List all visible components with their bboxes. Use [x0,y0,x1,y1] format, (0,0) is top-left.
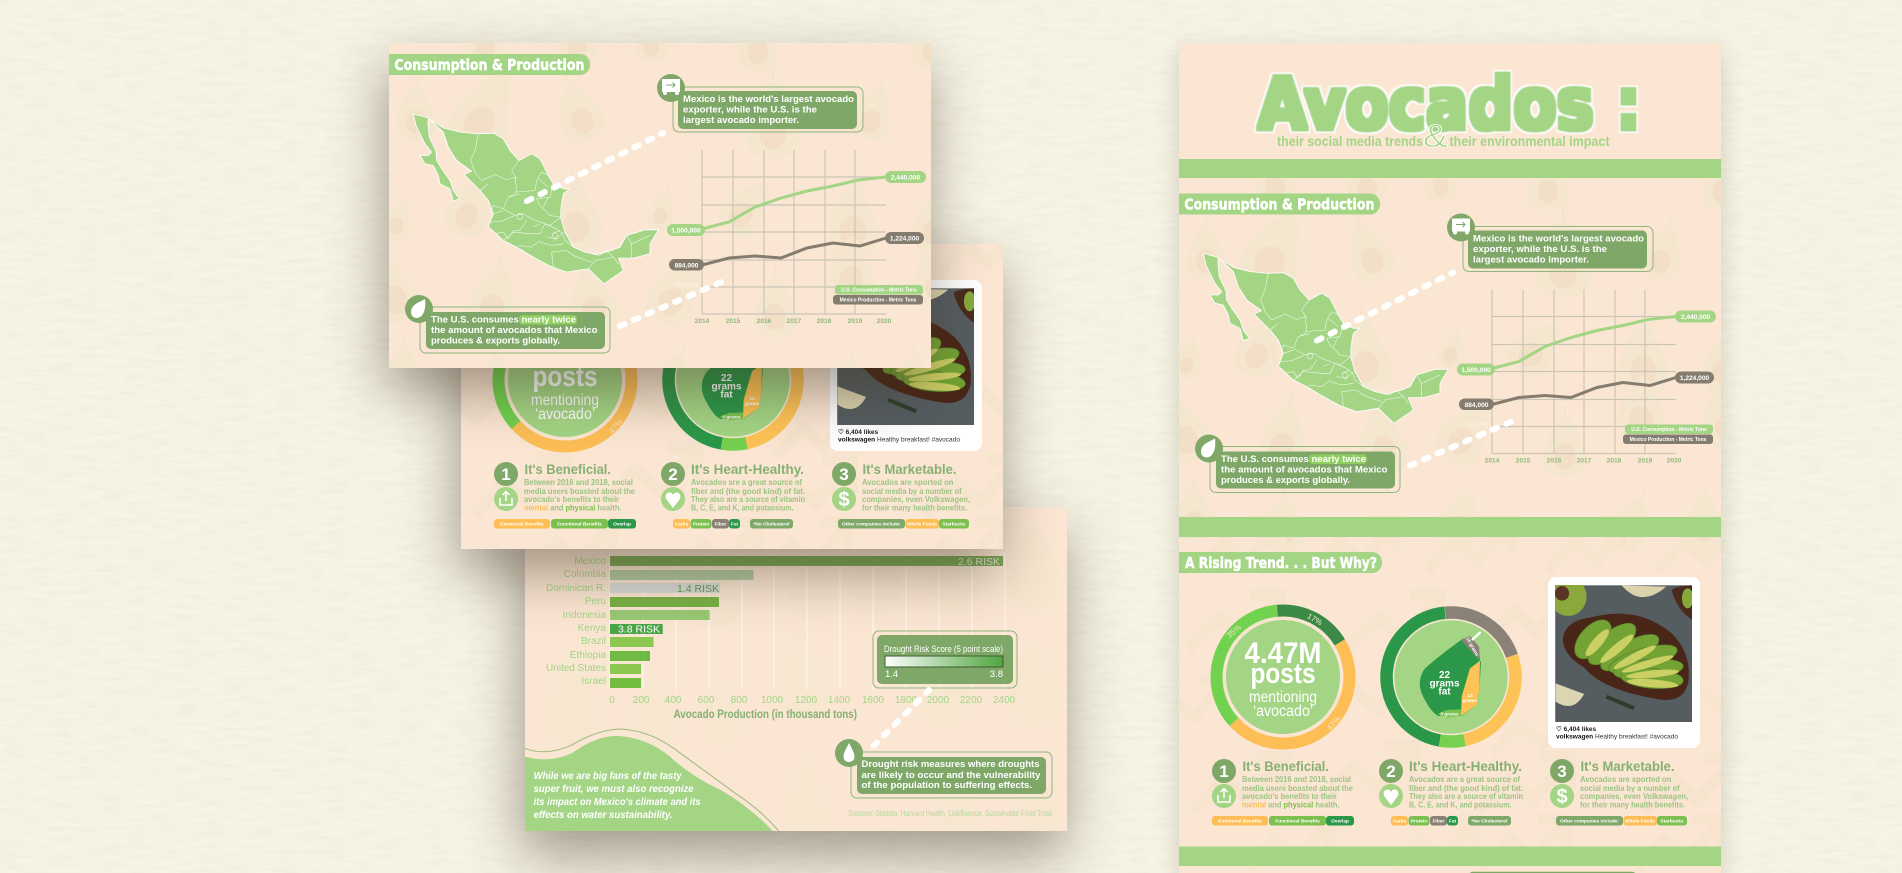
point 3: marketable: companies, even Volkswagen, [862,494,970,504]
line chart: 2017 [787,318,802,325]
line chart: U.S. Consumption - Metric Tons [841,288,917,294]
icon: avocado nutrition: 3 grams [722,414,741,420]
map of Mexico [413,114,658,284]
bar chart: avocado production: 1400 [828,695,851,706]
donut: 4.47M posts: 35% [1225,623,1243,640]
point 3: marketable: It's Marketable. [862,462,956,477]
point 1: beneficial: 1 [1219,762,1229,781]
point 1: beneficial: Between 2016 and 2018, social [1242,774,1351,784]
icon: delivery truck [657,74,685,102]
point 2: heart-healthy: *No Cholesterol [754,522,789,528]
bar chart: avocado production: 1200 [795,695,818,706]
point 2: heart-healthy: Fat [1449,818,1456,824]
donut: 4.47M posts: 47% [1325,714,1342,732]
point 2: heart-healthy: They also are a source of vitamin [1409,791,1523,801]
point 2: heart-healthy: It's Heart-Healthy. [1409,759,1522,774]
icon: avocado seed [1195,434,1223,462]
point 3: marketable: Avocados are sported on [1580,774,1671,784]
divider band [1179,159,1721,178]
bar chart: avocado production: Israel [582,676,606,687]
donut: 4.47M posts: posts [1250,658,1316,690]
donut: 4.47M posts: 35% [507,326,525,343]
point 3: marketable: 3 [839,465,849,484]
photo card: instagram post: volkswagen Healthy breakfast! #avocado [1556,734,1679,740]
icon: avocado nutrition: 13 [749,396,755,402]
line chart: 2014 [1485,458,1500,464]
icon: avocado nutrition [1420,633,1481,718]
point 2: heart-healthy: 2 [668,465,678,484]
bar chart: avocado production: Dominican R. [546,583,606,594]
section tag: Consumption & Production [1184,196,1374,214]
line chart: 2017 [1577,458,1592,464]
bar chart: avocado production: United States [546,663,606,674]
line chart: 2018 [817,318,832,325]
point 1: beneficial [1212,759,1354,826]
point 1: beneficial: It's Beneficial. [1242,759,1329,774]
icon: avocado nutrition: fat [1438,686,1451,698]
callout: exporter: largest avocado importer. [1473,254,1589,266]
line chart: 2015 [726,318,741,325]
callout: importer: produces & exports globally. [1221,475,1350,486]
icon: avocado nutrition: 10 grams [746,339,762,361]
donut: 4.47M posts: mentioning [531,392,599,409]
icon: avocado nutrition: 22 [1439,670,1450,681]
point 1: beneficial: Emotional Benefits [500,522,544,528]
photo card: instagram post: volkswagen Healthy breakfast! #avocado [838,436,961,444]
bar chart: avocado production: Ethiopia [570,650,606,661]
section background: avocados [1145,140,1750,557]
icon: share [494,487,518,511]
legend: drought risk score: 3.8 [990,669,1003,680]
point 2: heart-healthy: Protein [1411,818,1427,824]
point 2: heart-healthy: Carbs [1393,818,1407,824]
icon: dollar: $ [838,489,850,511]
bar chart: avocado production: 2400 [993,695,1016,706]
title: & [1423,118,1448,154]
point 3: marketable: 3 [1557,762,1567,781]
line chart: 2019 [1638,458,1653,464]
point 3: marketable [1550,759,1688,826]
point 1: beneficial: Overlap [613,522,631,528]
point 2: heart-healthy: fiber and (the good kind) of fat. [1409,783,1523,793]
section background: arrows [1149,521,1756,869]
section tag: A Rising Trend. . . But Why? [1185,554,1377,572]
callout: exporter [1447,214,1653,272]
bar chart: avocado production: Colombia [564,569,606,580]
point 3: marketable: Other companies include: [842,522,901,528]
point 3: marketable: companies, even Volkswagen, [1580,791,1688,801]
line chart: 1,224,000 [1680,375,1709,382]
line chart: 2019 [848,318,863,325]
line chart: Mexico Production - Metric Tons [1630,437,1707,443]
point 2: heart-healthy: fiber and (the good kind) of fat. [691,486,805,496]
dotted connector to importer callout [1410,420,1516,466]
line chart: 884,000 [675,262,699,270]
callout: exporter: Mexico is the world's largest avocado [683,94,854,105]
section tag: A Rising Trend. . . But Why? [467,257,659,275]
icon: water drop [835,739,863,767]
bar chart: avocado production: 2.6 RISK [958,556,1000,568]
panel: full infographic poster [1179,43,1721,873]
icon: avocado nutrition [702,336,763,420]
point 1: beneficial: Functional Benefits [557,522,602,528]
callout: drought risk: Drought risk measures where droughts [862,759,1040,770]
line chart: 2018 [1607,458,1622,464]
callout: importer: The U.S. consumes nearly twice [431,314,576,326]
line chart [1457,290,1716,464]
bar chart: avocado production: 1.4 RISK [677,583,719,595]
legend: drought risk score: 1.4 [885,669,898,680]
line chart: 2020 [1667,458,1682,464]
line chart: 2016 [1547,458,1562,464]
callout: drought risk: are likely to occur and the vulnerability [862,770,1041,781]
wave callout: super fruit, we must also recognize [534,783,694,795]
line chart: 2020 [877,318,892,325]
section: rising trend [1179,552,1700,826]
legend: drought risk score: Drought Risk Score (5 point scale) [884,644,1003,655]
callout: importer: the amount of avocados that Mexico [1221,464,1388,476]
line chart: 884,000 [1465,402,1489,409]
donut: nutrition [651,298,815,462]
point 1: beneficial: media users boasted about the [1242,783,1353,793]
point 3: marketable: for their many health benefits. [1580,800,1685,810]
callout: importer: the amount of avocados that Mexico [431,325,598,336]
dotted connector to exporter callout [1317,272,1453,340]
point 3: marketable: for their many health benefits. [862,502,967,512]
callout: importer [1195,434,1400,492]
point 3: marketable: social media by a number of [862,486,962,496]
point 1: beneficial: avocado's benefits to their [524,494,620,504]
point 1: beneficial: It's Beneficial. [524,462,611,477]
donut: 4.47M posts [1189,583,1377,771]
line chart: 500,000 [675,282,699,289]
point 2: heart-healthy: Avocados are a great source of [1409,774,1520,784]
divider band [1179,517,1721,537]
bar chart: avocado production: Mexico [574,556,606,567]
icon: avocado nutrition: grams [1429,678,1460,690]
callout: exporter: largest avocado importer. [683,115,799,126]
point 3: marketable: Other companies include: [1560,818,1619,824]
bar chart: avocado production: 600 [698,695,715,706]
callout: exporter: exporter, while the U.S. is the [1473,244,1607,255]
point 2: heart-healthy: B, C, E, and K, and potassium. [1409,800,1512,810]
point 3: marketable: Starbucks [1660,818,1684,824]
line chart: 1,224,000 [890,236,919,242]
point 2: heart-healthy: Fiber [1433,818,1444,824]
icon: heart [661,487,685,511]
wave callout: effects on water sustainability. [534,809,673,821]
bar chart: avocado production: 1000 [761,695,784,706]
icon: avocado nutrition: 22 [721,373,732,384]
divider band [1179,846,1721,866]
callout: drought risk: of the population to suffering effects. [862,780,1032,791]
line chart: 2016 [757,318,772,325]
point 2: heart-healthy [661,462,805,528]
point 1: beneficial: avocado's benefits to their [1242,791,1338,801]
point 3: marketable [832,462,970,528]
point 2: heart-healthy: Avocados are a great source of [691,477,802,487]
photo card: instagram post [830,280,982,451]
point 1: beneficial: media users boasted about the [524,486,635,496]
photo card: instagram post [1548,577,1700,748]
point 1: beneficial: Functional Benefits [1275,818,1320,824]
icon: dollar: $ [1556,786,1568,808]
icon: heart [1379,784,1403,808]
next section heading edge [1468,872,1637,873]
photo card: instagram post: ♡ 6,404 likes [1556,725,1597,733]
icon: share [1212,784,1236,808]
icon: delivery truck [1447,214,1475,242]
title: their environmental impact [1450,134,1610,149]
bar chart: avocado production: 0 [609,695,615,706]
callout: exporter: Mexico is the world's largest avocado [1473,234,1644,244]
line chart: 500,000 [1465,422,1489,428]
dotted connector to exporter callout [527,133,663,201]
callout: importer [405,295,610,353]
point 3: marketable: It's Marketable. [1580,759,1674,774]
line chart: 2,440,000 [891,174,920,182]
photo card: instagram post: ♡ 6,404 likes [838,428,879,436]
dotted connector to importer callout [620,280,726,326]
section: consumption and production [1179,194,1716,492]
icon: avocado seed [405,295,433,323]
point 1: beneficial: Overlap [1331,818,1349,824]
bar chart: avocado production: Peru [585,596,606,607]
donut: 4.47M posts: 17% [1306,612,1324,627]
panel: rising trend [461,244,1003,549]
title: their social media trends [1277,134,1423,149]
donut: 4.47M posts: 17% [588,315,606,330]
panel: consumption and production [389,43,931,368]
icon: avocado nutrition: 3 grams [1440,712,1459,718]
donut: 4.47M posts: mentioning [1249,689,1317,706]
point 3: marketable: social media by a number of [1580,783,1680,793]
point 2: heart-healthy: B, C, E, and K, and potassium. [691,502,794,512]
line chart: Mexico Production - Metric Tons [840,298,917,304]
bar chart: avocado production: 2000 [927,695,950,706]
point 3: marketable: Whole Foods [1625,818,1655,824]
line chart: 2014 [695,318,710,325]
line chart: 1,500,000 [1461,367,1491,374]
wave callout [525,729,780,832]
callout: exporter: exporter, while the U.S. is the [683,104,817,116]
title: Avocados : [1258,62,1641,146]
bar chart: avocado production: Brazil [581,636,606,647]
donut: 4.47M posts: 4.47M [526,340,604,373]
point 1: beneficial [494,462,636,528]
callout: importer: The U.S. consumes nearly twice [1221,454,1366,465]
bar chart: avocado production: Indonesia [563,610,606,621]
donut: 4.47M posts: 4.47M [1244,637,1322,670]
point 2: heart-healthy: They also are a source of vitamin [691,494,805,504]
point 1: beneficial: mental and physical health. [524,502,621,512]
donut: 4.47M posts: ‘avocado’ [1253,703,1313,720]
point 1: beneficial: Emotional Benefits [1218,818,1262,824]
section tag: Consumption & Production [394,56,584,74]
line chart [667,150,926,325]
icon: avocado nutrition: fat [720,390,733,400]
icon: avocado nutrition: 10 grams [1464,636,1480,658]
donut: nutrition [1369,595,1533,759]
bar chart: avocado production: 2200 [960,695,983,706]
point 3: marketable: Whole Foods [907,522,937,528]
bar chart: avocado production: 200 [633,695,650,706]
point 3: marketable: Starbucks [942,522,966,528]
bar chart: avocado production: 1600 [862,695,885,706]
bar chart: avocado production: Kenya [578,623,606,634]
callout: exporter [657,74,863,132]
point 3: marketable: Avocados are sported on [862,477,953,487]
wave callout: While we are big fans of the tasty [534,770,683,782]
point 1: beneficial: mental and physical health. [1242,800,1339,810]
line chart: 2,440,000 [1681,314,1710,321]
point 2: heart-healthy: *No Cholesterol [1472,818,1507,824]
bar chart: avocado production: 800 [731,695,748,706]
wave callout: its impact on Mexico's climate and its [534,796,701,808]
icon: avocado nutrition: grams [745,401,760,407]
donut: 4.47M posts: 47% [607,417,624,435]
point 2: heart-healthy: 2 [1386,762,1396,781]
donut: 4.47M posts: posts [532,361,598,393]
point 2: heart-healthy: It's Heart-Healthy. [691,462,804,477]
point 2: heart-healthy: Carbs [675,522,689,528]
line chart: U.S. Consumption - Metric Tons [1631,427,1707,433]
donut: 4.47M posts [471,286,659,474]
point 1: beneficial: 1 [501,465,511,484]
line chart: 1,500,000 [671,228,701,234]
dotted connector [874,690,929,746]
line chart: 2015 [1516,458,1531,464]
bar chart: avocado production [546,553,1016,721]
icon: avocado nutrition: grams [711,382,742,392]
point 2: heart-healthy [1379,759,1523,826]
point 2: heart-healthy: Protein [693,522,709,528]
callout: drought risk [835,739,1052,798]
point 2: heart-healthy: Fiber [715,522,726,528]
icon: avocado nutrition: grams [1463,698,1478,704]
point 1: beneficial: Between 2016 and 2018, social [524,477,633,487]
donut: 4.47M posts: ‘avocado’ [535,406,595,423]
map of Mexico [1203,253,1448,423]
point 2: heart-healthy: Fat [731,522,738,528]
callout: importer: produces & exports globally. [431,336,560,346]
legend: drought risk score [873,631,1017,688]
bar chart: avocado production: 400 [665,695,682,706]
bar chart: avocado production: 3.8 RISK [618,624,660,636]
panel: drought risk [525,507,1067,831]
bar chart: avocado production: 1800 [895,695,918,706]
icon: avocado nutrition: 13 [1467,693,1473,699]
bar chart: avocado production: Avocado Production (in thousand tons) [674,709,857,721]
